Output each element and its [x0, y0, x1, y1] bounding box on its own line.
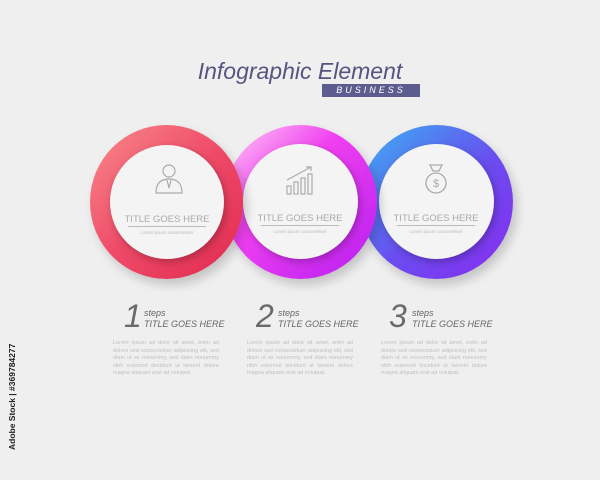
side watermark text: Adobe Stock | #369784277	[7, 344, 17, 450]
panel: circle 2: TITLE GOES HERE	[258, 213, 342, 224]
panel: circle 2	[224, 125, 377, 279]
panel: circle 1	[90, 125, 243, 279]
text: Lorem ipsum ad dolor sit amet, enim ad dolore sed consectetuer adipiscing elit, sed diam ut ex nonummy, sed diam nonummy nibh euismod tincidunt ut laoreet dolore magna aliquam erat ad volutpat.	[381, 340, 487, 376]
text: steps	[278, 308, 300, 318]
icon: money bag: $	[433, 178, 439, 190]
text: TITLE GOES HERE	[144, 319, 225, 329]
text: 2	[256, 298, 274, 334]
panel: circle 2: Lorem ipsum consectetuer	[273, 229, 327, 234]
step 2	[247, 298, 359, 376]
text: 1	[124, 298, 142, 334]
subtitle badge: BUSINESS	[336, 85, 406, 95]
text: TITLE GOES HERE	[412, 319, 493, 329]
panel: circle 1: TITLE GOES HERE	[124, 214, 210, 225]
icon: person	[155, 164, 183, 194]
panel: circle 3: Lorem ipsum consectetuer	[409, 229, 463, 234]
step 3	[381, 298, 493, 376]
panel: circle 1: Lorem ipsum consectetuer	[140, 230, 194, 235]
panel: circle 3	[360, 125, 513, 279]
text: TITLE GOES HERE	[278, 319, 359, 329]
icon: bar chart	[286, 166, 313, 195]
title: Infographic Element	[198, 58, 402, 84]
text: Lorem ipsum ad dolor sit amet, enim ad dolore sed consectetuer adipiscing elit, sed diam ut ex nonummy, sed diam nonummy nibh euismod tincidunt ut laoreet dolore magna aliquam erat ad volutpat.	[113, 340, 219, 376]
subtitle badge	[322, 84, 420, 97]
icon: money bag	[425, 164, 447, 194]
text: steps	[412, 308, 434, 318]
text: steps	[144, 308, 166, 318]
text: 3	[389, 298, 407, 334]
step 1	[113, 298, 225, 376]
text: Lorem ipsum ad dolor sit amet, enim ad dolore sed consectetuer adipiscing elit, sed diam ut ex nonummy, sed diam nonummy nibh euismod tincidunt ut laoreet dolore magna aliquam erat ad volutpat.	[247, 340, 353, 376]
text: TITLE GOES HERE	[394, 213, 478, 224]
